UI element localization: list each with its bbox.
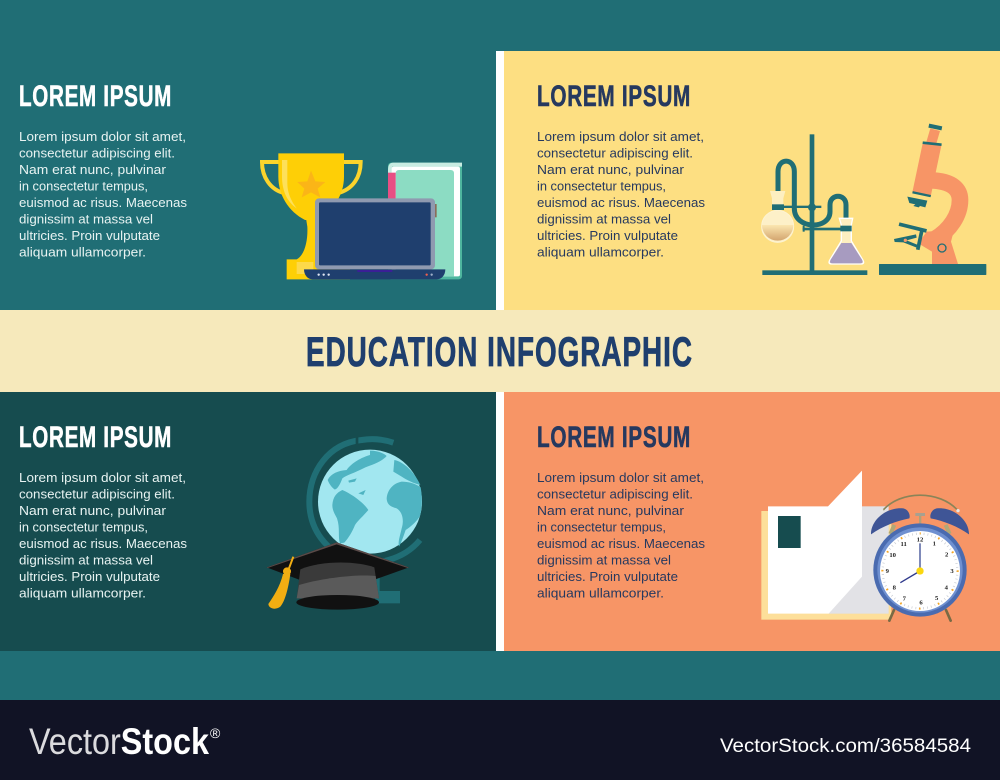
text block: top left: euismod ac risus. Maecenas	[19, 195, 187, 210]
text block: top left: consectetur adipiscing elit.	[19, 146, 175, 160]
panel: orange bottom right	[504, 392, 1000, 651]
icon: alarm clock: 2	[945, 552, 949, 559]
text block: bottom left: in consectetur tempus,	[19, 520, 148, 534]
text block: bottom left: consectetur adipiscing elit.	[19, 486, 175, 502]
text block: bottom left: Nam erat nunc, pulvinar	[19, 503, 167, 518]
text block: bottom right: euismod ac risus. Maecenas	[537, 536, 705, 551]
heading: bottom right: LOREM IPSUM	[537, 421, 691, 454]
icon: globe	[309, 437, 422, 603]
text block: bottom right	[537, 470, 705, 600]
panel: yellow top right	[504, 51, 1000, 310]
icon: alarm clock: 5	[935, 595, 939, 602]
text block: top right: euismod ac risus. Maecenas	[537, 195, 705, 210]
panel: dark teal bottom left	[0, 392, 496, 651]
icon: alarm clock: 4	[945, 584, 949, 591]
text block: top left: Lorem ipsum dolor sit amet,	[19, 129, 186, 144]
text block: bottom left	[19, 470, 187, 600]
text block: top left: aliquam ullamcorper.	[19, 244, 146, 260]
text block: top right: Lorem ipsum dolor sit amet,	[537, 129, 704, 144]
panel: teal top left	[0, 51, 496, 310]
icon: graduation cap	[267, 542, 409, 610]
text block: top right: consectetur adipiscing elit.	[537, 146, 693, 160]
icon: alarm clock	[871, 495, 969, 621]
heading: top right: LOREM IPSUM	[537, 80, 691, 113]
text block: top left: dignissim at massa vel	[19, 212, 153, 226]
text block: top left: in consectetur tempus,	[19, 178, 148, 194]
text block: bottom right: aliquam ullamcorper.	[537, 586, 664, 600]
icon: alarm clock: 12	[917, 537, 924, 544]
text block: bottom left: euismod ac risus. Maecenas	[19, 536, 187, 551]
text block: bottom right: Nam erat nunc, pulvinar	[537, 503, 685, 518]
text block: top left	[19, 129, 187, 260]
title: EDUCATION INFOGRAPHIC	[306, 328, 693, 375]
text block: top right: aliquam ullamcorper.	[537, 244, 664, 260]
icon: alarm clock: 3	[950, 568, 954, 575]
icon: trophy, books and laptop	[262, 153, 462, 279]
footer id: VectorStock.com/36584584	[720, 735, 971, 757]
text block: bottom right: dignissim at massa vel	[537, 552, 671, 568]
text block: top right: in consectetur tempus,	[537, 178, 666, 194]
icon: alarm clock: 10	[889, 552, 897, 559]
footer bar	[0, 700, 1000, 780]
text block: bottom left: Lorem ipsum dolor sit amet,	[19, 470, 186, 485]
text block: top left: Nam erat nunc, pulvinar	[19, 162, 167, 177]
text block: bottom right: in consectetur tempus,	[537, 520, 666, 534]
heading: top left: LOREM IPSUM	[19, 80, 172, 113]
text block: top right: Nam erat nunc, pulvinar	[537, 162, 685, 177]
text block: top left: ultricies. Proin vulputate	[19, 228, 160, 243]
icon: alarm clock: 7	[903, 595, 907, 602]
footer logo: VectorStock	[29, 721, 209, 762]
icon: open book	[761, 471, 891, 620]
icon: alarm clock: 11	[901, 541, 907, 548]
registered mark: ®	[210, 725, 221, 741]
icon: microscope	[879, 124, 986, 275]
text block: top right	[537, 129, 705, 260]
icon: alarm clock: 1	[933, 540, 936, 547]
icon: alarm clock: 6	[919, 599, 923, 606]
text block: top right: dignissim at massa vel	[537, 212, 671, 226]
text block: bottom left: ultricies. Proin vulputate	[19, 569, 160, 584]
title band	[0, 310, 1000, 392]
heading: bottom left: LOREM IPSUM	[19, 421, 172, 454]
text block: bottom right: Lorem ipsum dolor sit amet,	[537, 470, 704, 485]
icon: alarm clock: 8	[893, 584, 897, 591]
text block: bottom right: consectetur adipiscing elit.	[537, 486, 693, 502]
text block: top right: ultricies. Proin vulputate	[537, 228, 678, 243]
icon: lab flasks on stand	[762, 134, 867, 275]
text block: bottom left: aliquam ullamcorper.	[19, 586, 146, 600]
text block: bottom right: ultricies. Proin vulputate	[537, 569, 678, 584]
text block: bottom left: dignissim at massa vel	[19, 552, 153, 568]
icon: alarm clock: 9	[886, 568, 890, 575]
